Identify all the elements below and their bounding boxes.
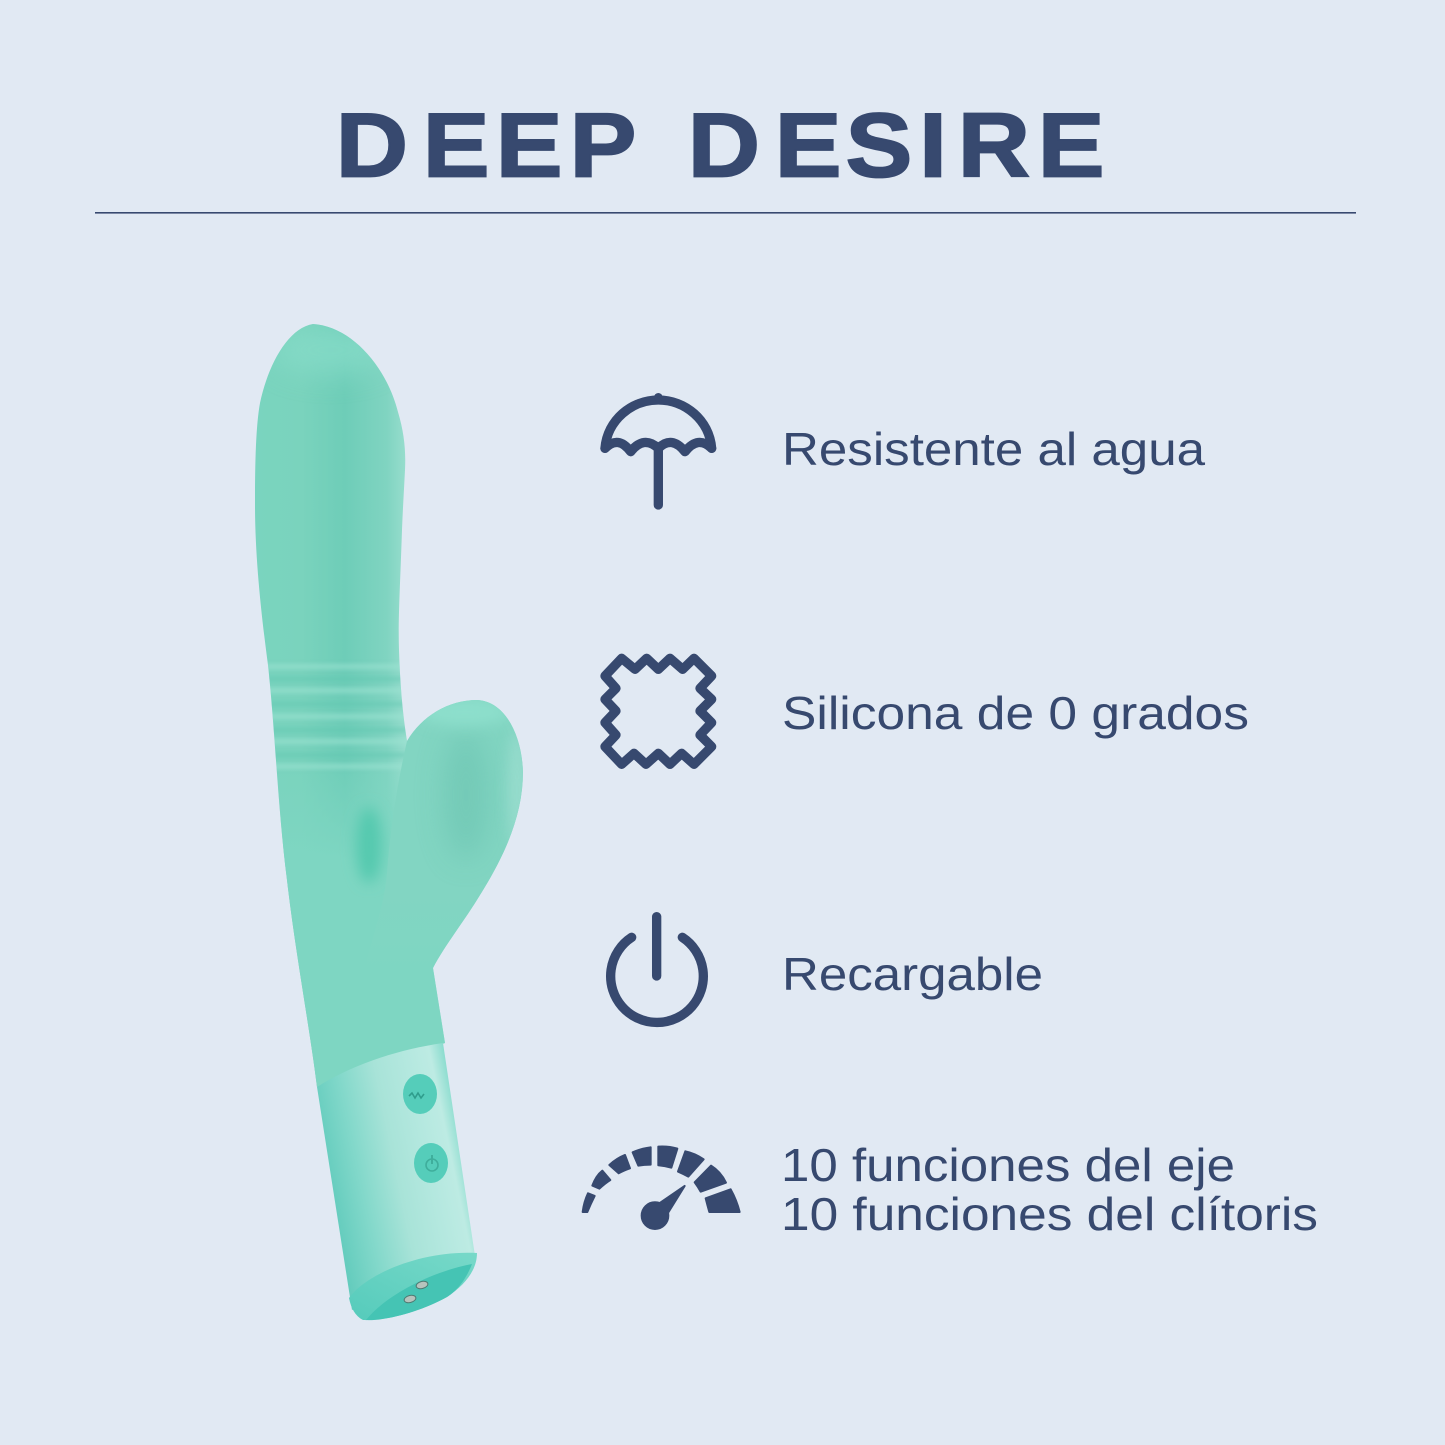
- base cap: [349, 1253, 477, 1320]
- icon: power: [611, 917, 703, 1022]
- feature: silicone: [605, 658, 1249, 764]
- charging contacts: [403, 1280, 429, 1304]
- power button: [414, 1143, 448, 1183]
- feature: rechargeable: [611, 917, 1043, 1022]
- label: Resistente al agua: [782, 423, 1205, 475]
- icon: umbrella: [605, 395, 712, 505]
- label: Silicona de 0 grados: [782, 687, 1249, 739]
- metal handle: [317, 1043, 475, 1310]
- shadow at arm junction: [356, 807, 382, 883]
- feature: functions: 10 funciones del clítoris: [781, 1188, 1318, 1240]
- label: Recargable: [782, 948, 1043, 1000]
- label: 10 funciones del eje: [781, 1139, 1235, 1191]
- silicone body with rabbit arm: [255, 324, 523, 1087]
- ribbed rings: [268, 663, 398, 770]
- infographic canvas: [95, 112, 1356, 1320]
- top highlight: [280, 327, 373, 375]
- icon: zigzag square: [605, 658, 712, 764]
- feature: water resistant: [605, 395, 1205, 505]
- title: DEEP DESIRE: [336, 95, 1104, 196]
- vibration button: [403, 1074, 437, 1114]
- icon: speedometer: [583, 1147, 740, 1229]
- feature: functions: [583, 1139, 1318, 1240]
- rabbit arm: [388, 700, 523, 869]
- product illustration: [255, 324, 523, 1320]
